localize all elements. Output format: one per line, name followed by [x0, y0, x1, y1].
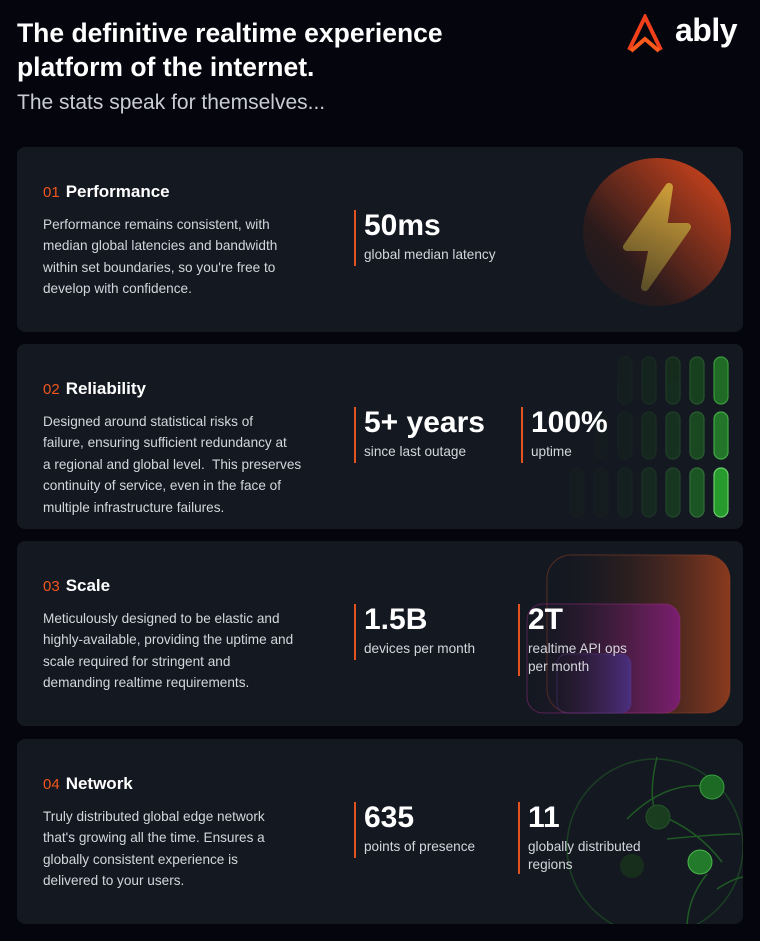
- panel: network: [17, 739, 743, 924]
- text block: Meticulously designed to be elastic and: [43, 611, 280, 626]
- stat: 5+ years: [354, 407, 485, 463]
- panel: scale: [17, 541, 743, 726]
- logo: ably: ably: [675, 12, 737, 48]
- text block: Designed around statistical risks of: [43, 414, 253, 429]
- stat: 2T: per month: [528, 659, 589, 674]
- text block: Performance remains consistent, with: [43, 217, 270, 232]
- stat: 635: [354, 802, 475, 858]
- heading: 01 Performance: [43, 182, 170, 201]
- text block: within set boundaries, so you're free to: [43, 260, 275, 275]
- stat: 50ms: global median latency: [364, 247, 496, 262]
- text block: scale required for stringent and: [43, 654, 230, 669]
- icon: lightning circle: [583, 158, 731, 306]
- panel: performance: [17, 147, 743, 332]
- stat: 50ms: 50ms: [364, 209, 441, 242]
- chart: uptime pills: [618, 356, 729, 518]
- stat: 50ms: [354, 210, 496, 266]
- text block: [43, 414, 301, 515]
- stat: 100%: uptime: [531, 444, 572, 459]
- text block: Truly distributed global edge network: [43, 809, 265, 824]
- text block: delivered to your users.: [43, 873, 184, 888]
- graphic: nested squares: [526, 554, 730, 714]
- logo: ably: [627, 12, 738, 52]
- text block: a regional and global level. This preserves: [43, 457, 301, 472]
- text block: [43, 217, 277, 296]
- stat: 635: points of presence: [364, 839, 475, 854]
- title: The definitive realtime experience: [17, 18, 443, 48]
- panel: reliability: [17, 344, 743, 529]
- text block: failure, ensuring sufficient redundancy at: [43, 435, 287, 450]
- graphic: network globe: [566, 757, 743, 924]
- stat: 1.5B: devices per month: [364, 641, 475, 656]
- stat: 11: [518, 802, 641, 874]
- text block: highly-available, providing the uptime and: [43, 632, 293, 647]
- stat: 11: 11: [528, 801, 560, 834]
- title: [17, 18, 443, 82]
- stat: 100%: 100%: [531, 406, 608, 439]
- stat: 1.5B: [354, 604, 475, 660]
- text block: [43, 611, 293, 690]
- stat: 635: 635: [364, 801, 414, 834]
- stat: 2T: [518, 604, 627, 676]
- subtitle: The stats speak for themselves...: [17, 91, 325, 114]
- stat: 2T: 2T: [528, 603, 563, 636]
- text block: develop with confidence.: [43, 281, 192, 296]
- stat: 11: regions: [528, 857, 573, 872]
- stat: 5+ years: since last outage: [364, 444, 466, 459]
- stat: 5+ years: 5+ years: [364, 406, 485, 439]
- text block: that's growing all the time. Ensures a: [43, 830, 265, 845]
- stat: 2T: realtime API ops: [528, 641, 627, 656]
- heading: 03 Scale: [43, 576, 110, 595]
- text block: median global latencies and bandwidth: [43, 238, 277, 253]
- title: platform of the internet.: [17, 52, 314, 82]
- heading: 04 Network: [43, 774, 133, 793]
- stat: 11: globally distributed: [528, 839, 641, 854]
- text block: globally consistent experience is: [43, 852, 238, 867]
- text block: multiple infrastructure failures.: [43, 500, 224, 515]
- text block: demanding realtime requirements.: [43, 675, 249, 690]
- stat: 100%: [521, 407, 608, 463]
- text block: [43, 809, 265, 888]
- heading: 02 Reliability: [43, 379, 146, 398]
- text block: continuity of service, even in the face of: [43, 478, 281, 493]
- stat: 1.5B: 1.5B: [364, 603, 427, 636]
